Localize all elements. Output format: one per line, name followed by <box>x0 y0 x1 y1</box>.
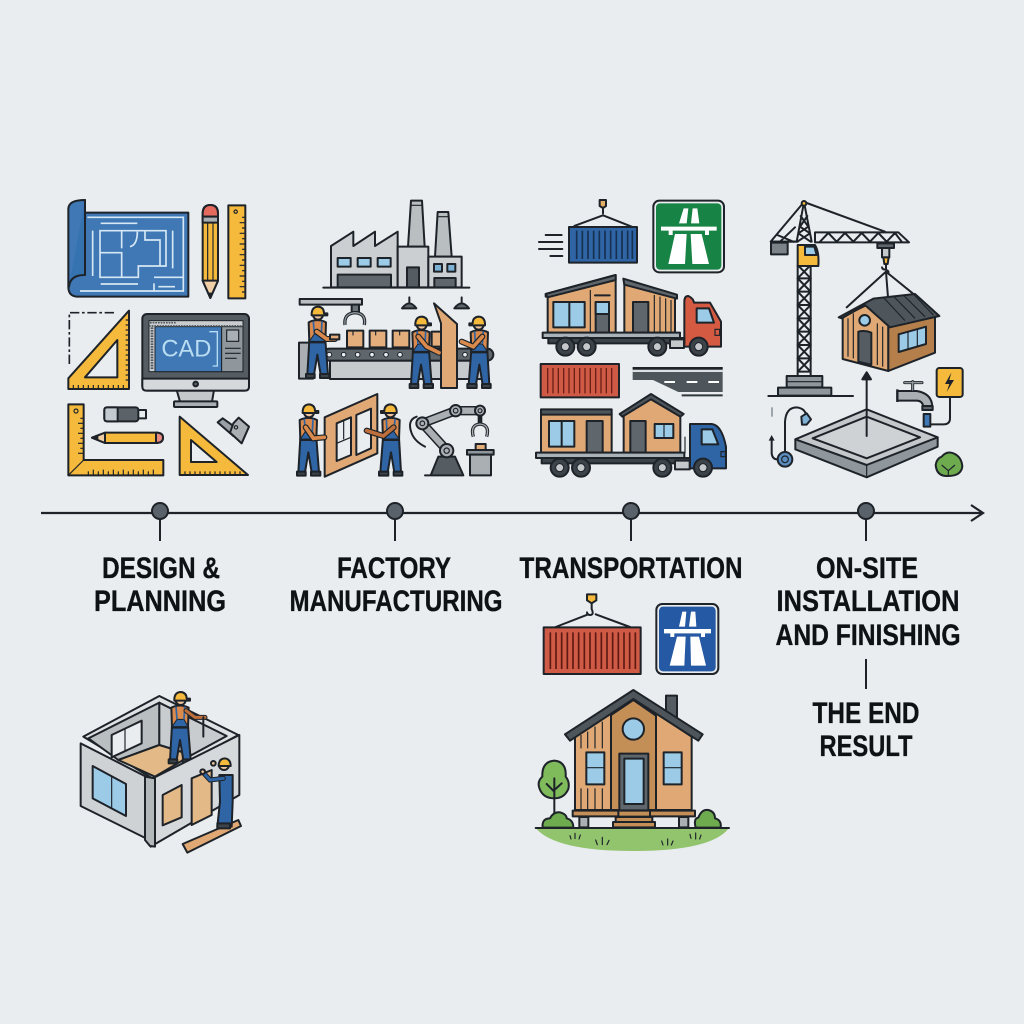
icon: workers assembling room <box>81 692 241 853</box>
panel: transportation icons <box>536 200 726 477</box>
icon: grass ground <box>536 828 729 851</box>
icon: electricity box <box>931 368 963 424</box>
marker 2 <box>387 503 403 541</box>
heading: on-site installation and finishing: ON-SITE <box>816 552 918 585</box>
icon: blueprint <box>68 200 188 297</box>
icon: USB eraser <box>104 407 146 421</box>
icon: foundation slab <box>795 409 938 477</box>
icon: set square with dashed guide <box>68 311 129 389</box>
heading: on-site installation and finishing: INSTALLATION <box>776 585 960 618</box>
front walls <box>81 735 239 847</box>
heading: factory manufacturing: MANUFACTURING <box>290 585 502 618</box>
icon: lifting arrow <box>862 372 871 437</box>
plank <box>183 820 241 853</box>
panel: factory manufacturing icons <box>297 201 494 477</box>
icon: pencil <box>203 205 218 298</box>
marker 4 <box>858 503 874 541</box>
icon: lifted red container <box>544 594 641 674</box>
icon: bushes <box>543 810 721 828</box>
icon: suspended house <box>839 272 939 371</box>
icon: bush <box>936 453 962 476</box>
heading: on-site installation and finishing <box>776 552 960 652</box>
icon: CAD monitor <box>142 314 249 407</box>
marker 3 <box>623 503 639 541</box>
heading: factory manufacturing <box>290 552 502 618</box>
icon: L square <box>68 404 163 475</box>
icon: road <box>633 367 723 395</box>
timeline <box>41 505 983 521</box>
icon: assembly line <box>299 297 493 388</box>
connector <box>865 659 867 689</box>
heading: design and planning <box>94 552 226 618</box>
heading: design and planning: PLANNING <box>94 585 226 618</box>
icon: red container <box>541 364 619 397</box>
room back walls <box>83 696 238 780</box>
icon: tree <box>539 761 569 814</box>
icon: factory building <box>323 201 469 288</box>
heading: the end result: RESULT <box>820 730 912 763</box>
arrow <box>971 505 983 521</box>
icon: blue truck with module <box>536 394 726 477</box>
worker on plank <box>200 758 233 828</box>
icon: wall panel with two workers <box>297 394 402 477</box>
panel: design and planning icons <box>68 200 249 475</box>
icon: tower crane <box>768 201 909 396</box>
marker 1 <box>152 503 168 541</box>
icon: blue motorway sign <box>656 604 718 674</box>
panel: on-site installation icons <box>768 201 963 477</box>
icon: water tap <box>897 382 933 427</box>
icon: workers on line <box>306 307 491 388</box>
heading: transportation: TRANSPORTATION <box>520 552 742 585</box>
heading: factory manufacturing: FACTORY <box>337 552 451 585</box>
worker standing in room <box>169 692 205 763</box>
icon: protractor tool <box>218 418 249 443</box>
heading: on-site installation and finishing: AND FINISHING <box>776 619 960 652</box>
heading: the end result <box>812 697 920 763</box>
icon: green motorway sign <box>653 201 724 272</box>
icon: lifted blue container <box>539 200 637 263</box>
icon: utility cable <box>769 407 811 467</box>
icon: robot arm <box>410 405 494 475</box>
heading: the end result: THE END <box>812 697 920 730</box>
icon: small pencil <box>92 433 163 443</box>
panel: end result icons <box>536 594 729 851</box>
heading: design and planning: DESIGN & <box>102 552 220 585</box>
icon: CAD monitor: CAD <box>161 335 211 362</box>
icon: set square <box>180 417 248 475</box>
icon: finished house <box>565 690 703 827</box>
icon: ruler <box>228 205 245 298</box>
icon: red truck with module <box>543 275 721 356</box>
